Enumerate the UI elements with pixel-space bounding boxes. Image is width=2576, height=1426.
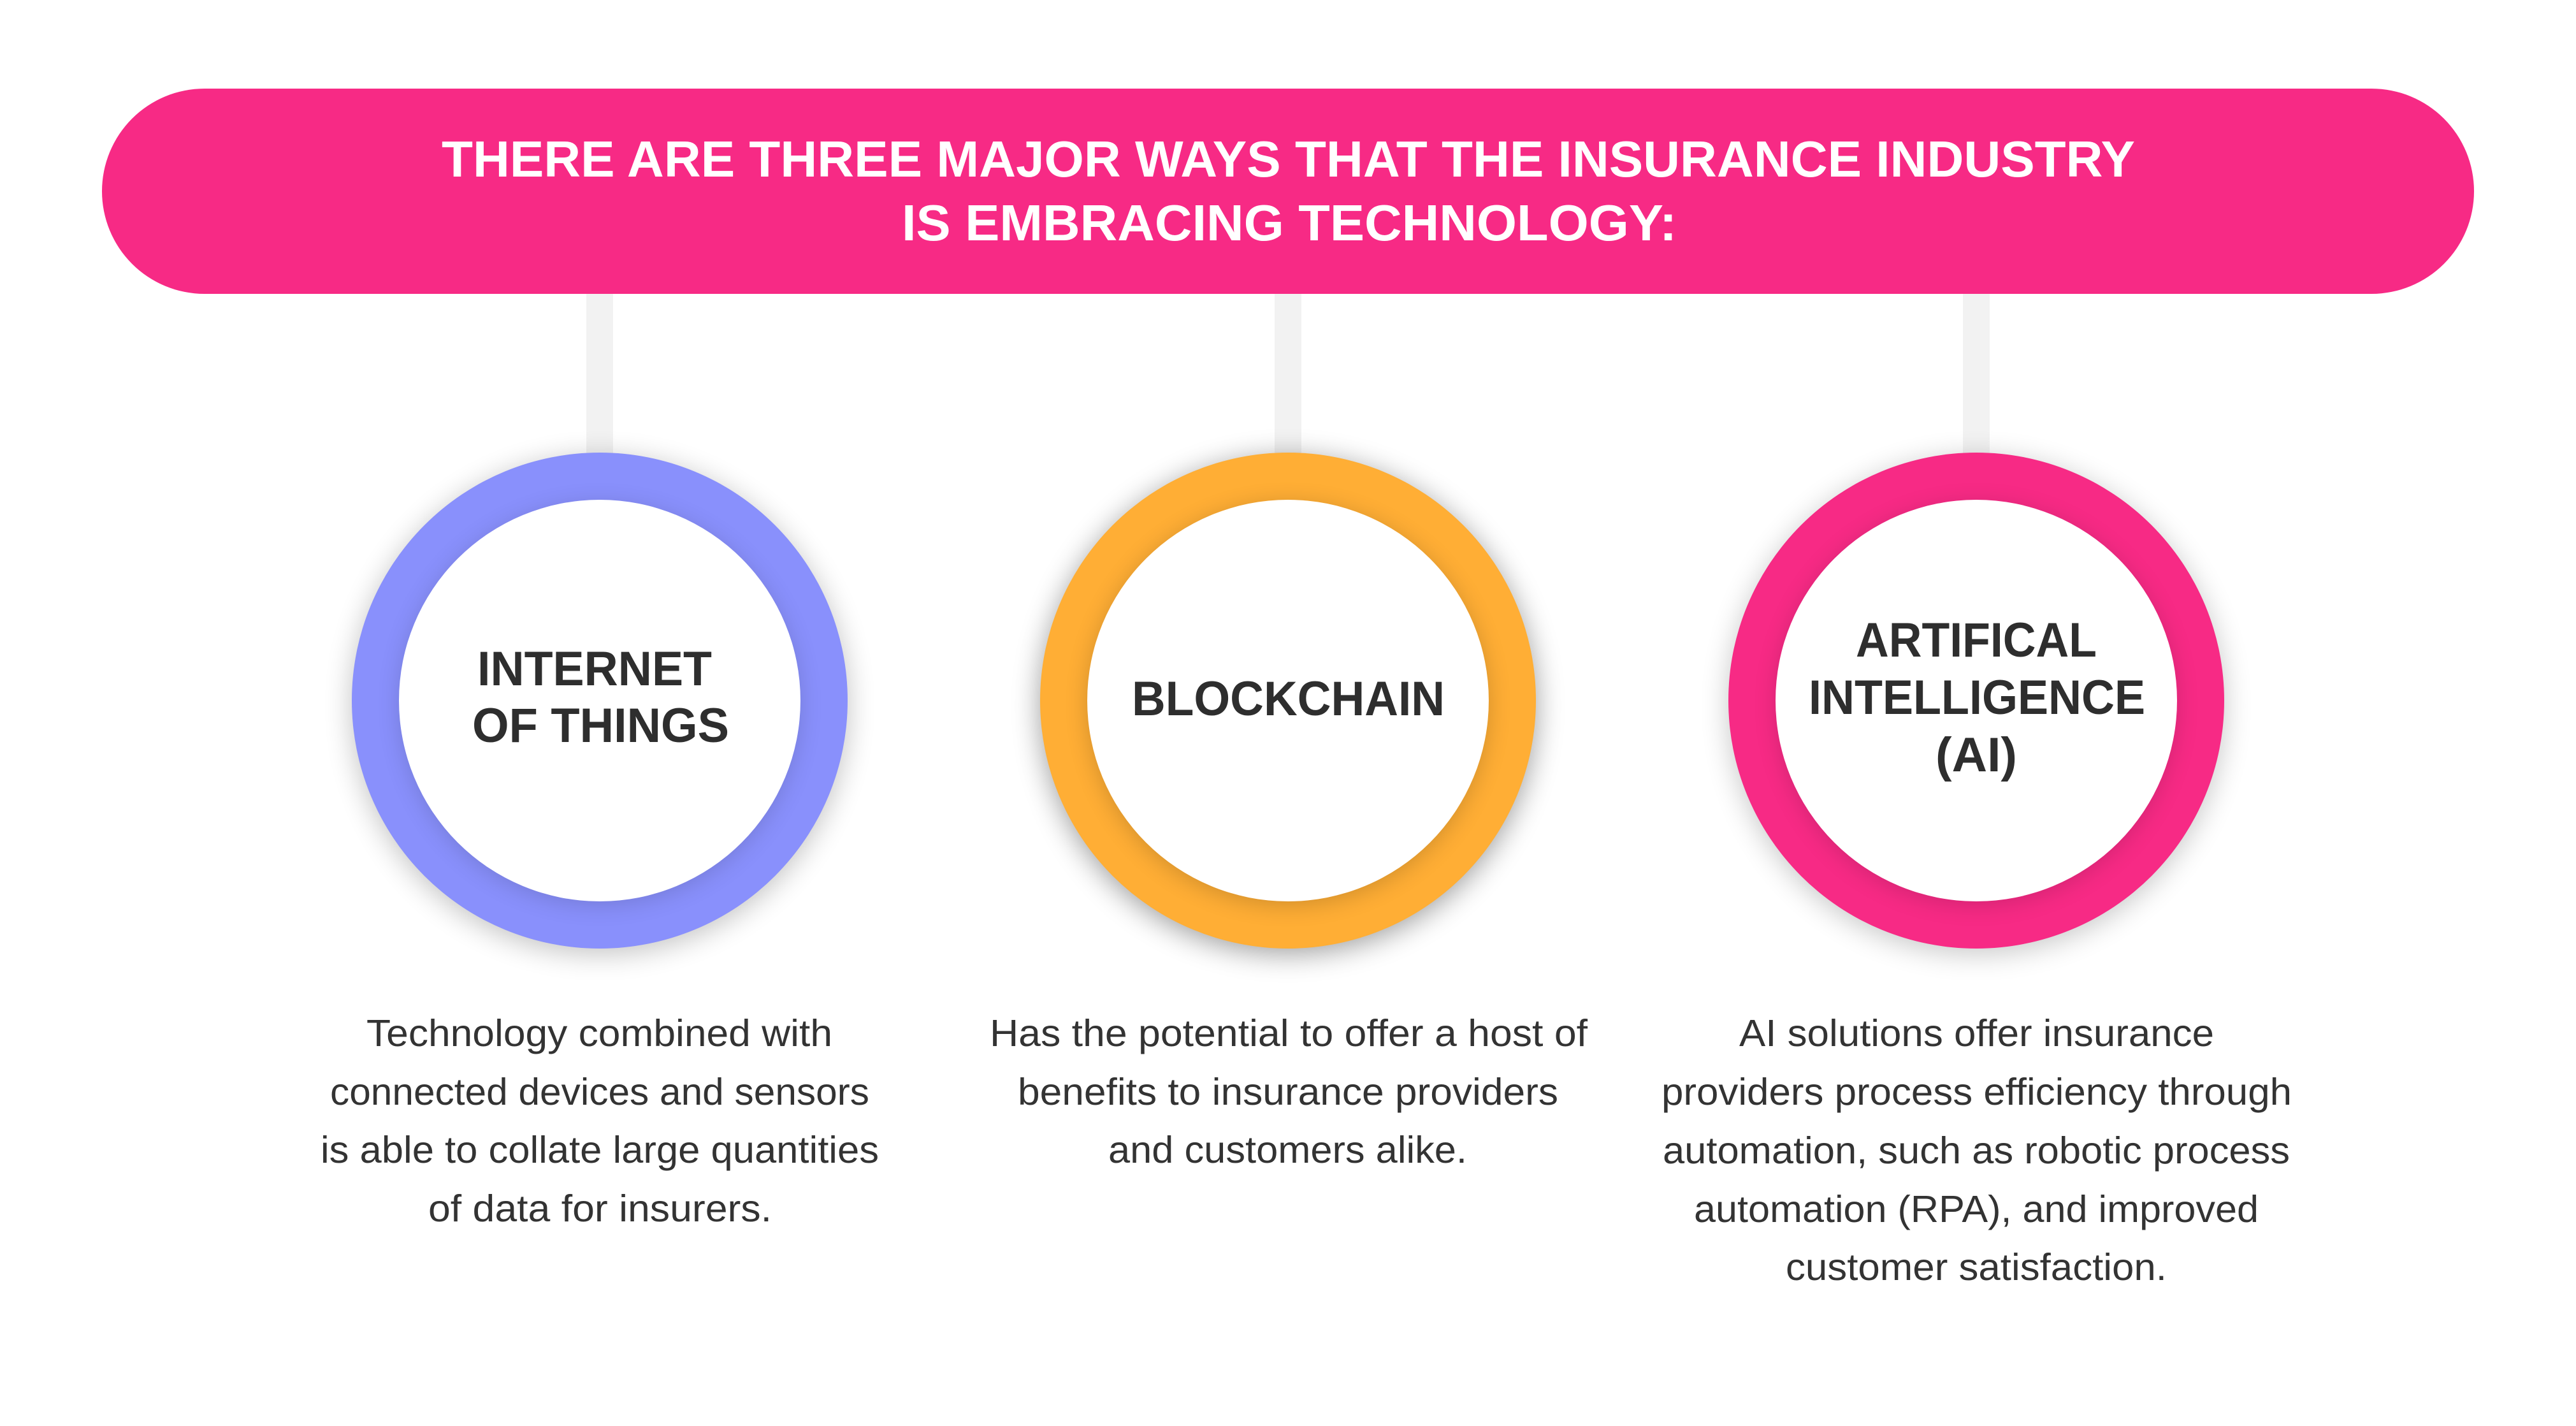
badge title: internet of things — [472, 642, 729, 753]
description: internet of things: connected devices and sensors — [330, 1071, 869, 1113]
badge title: artifical intelligence: INTELLIGENCE — [1809, 671, 2145, 725]
header banner — [102, 89, 2474, 294]
header title line 2: IS EMBRACING TECHNOLOGY: — [902, 194, 1677, 251]
description: artificial intelligence: automation, such as robotic process — [1663, 1130, 2290, 1172]
description: blockchain: and customers alike. — [1108, 1129, 1467, 1171]
description: internet of things: Technology combined with — [366, 1012, 832, 1054]
badge title: blockchain: BLOCKCHAIN — [1132, 672, 1445, 726]
badge title: artifical intelligence — [1809, 613, 2145, 782]
connector: internet of things — [586, 280, 613, 472]
header title line 1: THERE ARE THREE MAJOR WAYS THAT THE INSURANCE INDUSTRY — [442, 131, 2135, 187]
description: artificial intelligence: customer satisfaction. — [1786, 1246, 2167, 1288]
connector: blockchain — [1275, 280, 1301, 472]
description: internet of things: is able to collate large quantities — [321, 1129, 879, 1171]
panel: artificial intelligence badge — [1728, 453, 2224, 954]
description: blockchain: benefits to insurance providers — [1018, 1071, 1558, 1113]
badge title: artifical intelligence: ARTIFICAL — [1856, 613, 2097, 667]
description: internet of things: of data for insurers. — [428, 1188, 772, 1230]
connector: artificial intelligence — [1963, 280, 1990, 472]
badge title: internet of things: OF THINGS — [472, 699, 729, 753]
badge title: artifical intelligence: (AI) — [1936, 728, 2017, 782]
description: internet of things — [321, 1012, 879, 1230]
description: artificial intelligence: automation (RPA), and improved — [1694, 1188, 2259, 1230]
description: artificial intelligence: AI solutions offer insurance — [1739, 1012, 2214, 1054]
description: artificial intelligence: providers process efficiency through — [1661, 1071, 2292, 1113]
description: blockchain — [990, 1012, 1588, 1171]
badge title: internet of things: INTERNET — [477, 642, 712, 696]
description: blockchain: Has the potential to offer a host of — [990, 1012, 1588, 1054]
panel: blockchain badge — [1040, 453, 1536, 954]
panel: internet of things badge — [352, 453, 848, 954]
description: artificial intelligence — [1661, 1012, 2292, 1288]
